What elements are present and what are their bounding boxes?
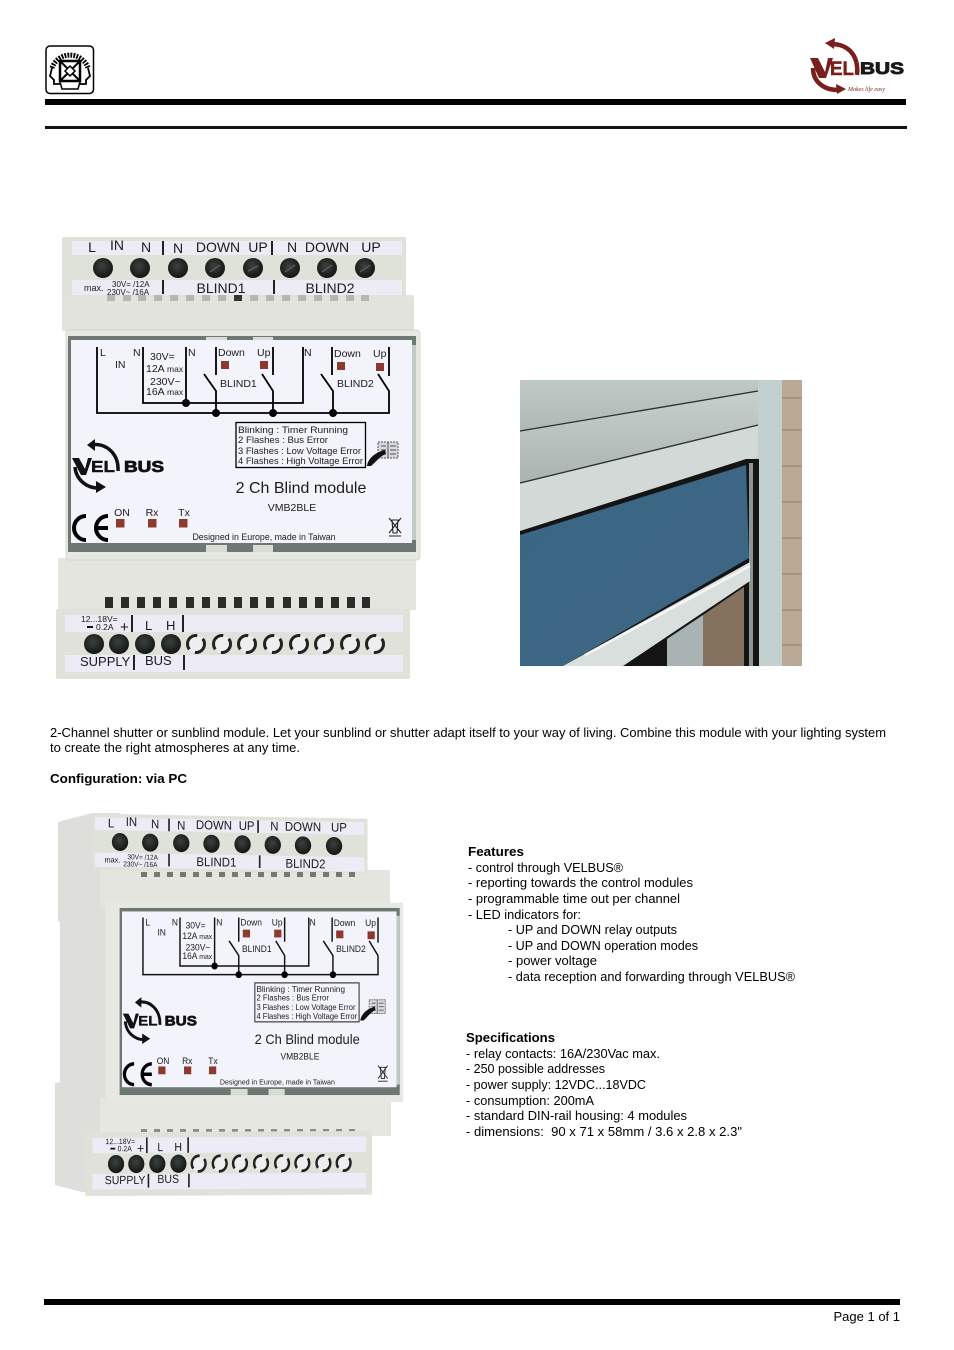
top terminal block: DOWN [305,239,349,255]
panel logo: Velbus: BUS [165,1013,197,1029]
wiring diagram: Up [373,348,387,360]
LED flash legend box [236,422,366,468]
panel logo: Velbus [72,439,164,493]
bottom terminal block: 0.2A [96,622,114,632]
features list: - UP and DOWN operation modes [508,939,698,953]
page number: Page 1 of 1 [834,1309,900,1324]
top terminal block: BLIND1 [196,854,237,870]
top terminal block: N [141,239,151,255]
top terminal block: UP [361,239,381,255]
wiring diagram: Up [272,917,283,927]
status LEDs: Rx [182,1056,193,1066]
top terminal block: DOWN [196,818,232,833]
header rule thin [45,126,907,129]
features list: - programmable time out per channel [468,892,680,906]
top terminal block: IN [110,237,124,253]
LED flash legend box: 3 Flashes : Low Voltage Error [238,446,361,457]
panel logo: Velbus: BUS [124,459,164,476]
LED flash legend box: Blinking : Timer Running [238,425,348,436]
wiring diagram [97,347,389,417]
bottom terminal block: 12...18V= [106,1137,135,1146]
bottom terminal block: L [157,1142,163,1154]
brick wall [782,380,802,666]
features list: - data reception and forwarding through VELBUS® [508,970,796,984]
header right logo: Velbus: Makes life easy [847,86,885,93]
shutter bottom bar [520,426,758,532]
wiring diagram: 30V= [186,920,206,931]
wiring diagram: BLIND1 [220,378,257,390]
bottom terminal block: + [120,619,129,636]
header right logo: Velbus: BUS [860,59,904,78]
photo: module front view [56,237,420,679]
status LEDs: Tx [178,507,191,519]
bottom terminal block: SUPPLY [105,1174,146,1187]
features list: - power voltage [508,954,597,968]
wiring diagram: Down [218,347,245,359]
top terminal block: max. [84,283,104,293]
top terminal block: L [108,816,114,831]
blue blind fabric [520,465,749,666]
status LEDs: Rx [146,507,159,519]
features list: - UP and DOWN relay outputs [508,923,677,937]
wiring diagram: 30V= [150,351,175,363]
header right logo: Velbus [810,38,904,94]
configuration line: Configuration: via PC [50,772,187,786]
top terminal block: IN [126,814,137,829]
intro paragraph: 2-Channel shutter or sunblind module. Let your sunblind or shutter adapt itself to your way of living. Combine this module with your lighting system [50,726,886,740]
module name: 2 Ch Blind module [236,480,366,497]
LED flash legend box [255,983,359,1022]
specifications list: - dimensions: 90 x 71 x 58mm / 3.6 x 2.8 x 2.3" [466,1125,742,1139]
status LEDs: Tx [208,1056,218,1066]
icon: WEEE bin [389,518,401,536]
wiring diagram: IN [115,359,126,371]
specifications list: - power supply: 12VDC...18VDC [466,1078,646,1092]
top terminal block: 30V= /12A [112,280,150,289]
top vent row [141,872,355,877]
top terminal block: max. [104,855,120,865]
top terminal block: L [88,239,96,255]
top terminal block [62,237,406,300]
lower housing band [100,1098,391,1136]
panel logo: Velbus: EL [91,459,115,476]
shutter slats [520,380,758,431]
specifications list [466,1031,742,1139]
origin note: Designed in Europe, made in Taiwan [220,1077,335,1087]
wiring diagram: BLIND2 [336,944,366,954]
bottom terminal block: BUS [145,653,172,668]
bottom terminal block: H [174,1141,182,1154]
features list: - reporting towards the control modules [468,876,693,890]
wiring diagram: N [133,347,141,359]
wiring diagram: IN [157,927,166,938]
bottom terminal block: + [137,1140,144,1156]
wiring diagram: 230V~ [150,376,181,388]
module name: 2 Ch Blind module [255,1032,360,1047]
panel logo: Velbus: EL [138,1013,157,1029]
bottom terminal block: SUPPLY [80,654,131,669]
brick in window [703,587,744,666]
photo: module angled view [55,813,403,1196]
wiring diagram: L [145,917,150,927]
model number: VMB2BLE [268,502,316,514]
top terminal block: BLIND2 [285,856,326,871]
top terminal block: DOWN [285,819,321,834]
wiring diagram: BLIND1 [242,944,272,954]
bottom terminal block [56,609,410,679]
wiring diagram: Down [334,348,361,360]
intro paragraph [50,726,886,755]
wiring diagram: 12A max [146,363,184,375]
icon: WEEE bin [378,1066,388,1081]
wiring diagram: 12A max [182,931,213,941]
wiring diagram: 16A max [146,386,184,398]
intro paragraph: to create the right atmospheres at any time. [50,741,300,755]
top terminal block: N [177,818,185,833]
top terminal block: 230V~ /16A [107,288,150,297]
features list: Features [468,845,524,859]
wiring diagram: N [304,347,312,359]
wiring diagram: L [100,347,106,359]
specifications list: - relay contacts: 16A/230Vac max. [466,1047,660,1061]
LED flash legend box: 4 Flashes : High Voltage Error [238,456,363,467]
top terminal block: UP [248,239,268,255]
features list: - control through VELBUS® [468,861,624,875]
wiring diagram: BLIND2 [337,378,374,390]
wiring diagram: Down [240,917,262,927]
LED flash legend box: 2 Flashes : Bus Error [256,993,329,1003]
bottom terminal block: 0.2A [118,1144,132,1153]
specifications list: - standard DIN-rail housing: 4 modules [466,1109,687,1123]
upper housing band [100,870,390,908]
top terminal block: BLIND2 [305,280,355,296]
footer rule [44,1299,900,1305]
top terminal block [91,814,368,874]
top terminal block: N [173,240,183,256]
bottom terminal block: BUS [157,1173,179,1186]
header left logo [46,46,94,94]
front panel with printed label [105,903,403,1102]
specifications list: - consumption: 200mA [466,1094,595,1108]
icon: manual and hand [360,1000,385,1021]
window frame below blind [667,615,703,666]
panel logo: Velbus [123,997,197,1044]
LED flash legend box: 2 Flashes : Bus Error [238,435,328,446]
window gap [520,459,759,666]
lower housing band [58,558,416,610]
model number: VMB2BLE [280,1051,320,1062]
status LEDs [114,507,191,528]
side frame [759,380,782,666]
specifications list: - 250 possible addresses [466,1062,605,1076]
wiring diagram: Down [334,918,355,928]
top terminal block: DOWN [196,239,240,255]
icon: CE mark [124,1064,152,1085]
top terminal block: 230V~ /16A [123,861,158,869]
top terminal block: N [270,819,279,834]
front panel with printed label [66,330,420,560]
wiring diagram: Up [365,918,376,928]
bottom terminal block [85,1131,372,1196]
icon: CE mark [74,516,108,540]
top terminal block: 30V= /12A [127,854,158,862]
status LEDs [157,1056,218,1074]
bottom terminal block: H [166,618,175,633]
header rule thick [45,99,906,105]
LED flash legend box: Blinking : Timer Running [256,985,345,994]
blind bottom bar [563,562,750,666]
LED flash legend box: 3 Flashes : Low Voltage Error [256,1003,356,1012]
wiring diagram: 230V~ [186,942,210,952]
bottom terminal block: 12...18V= [81,614,118,624]
wiring diagram: N [172,917,178,927]
bottom terminal block: L [145,618,152,633]
wiring diagram: 16A max [182,951,213,961]
status LEDs: ON [114,507,130,519]
origin note: Designed in Europe, made in Taiwan [192,532,336,542]
wiring diagram: N [188,347,196,359]
upper housing band [62,295,414,331]
specifications list: Specifications [466,1031,555,1045]
top terminal block: UP [331,820,347,835]
header right logo: Velbus: EL [830,59,854,80]
wiring diagram [143,917,378,978]
housing side wall [55,813,120,1192]
wiring diagram: N [216,917,222,927]
features list [468,845,796,984]
top terminal block: N [151,817,159,832]
icon: manual and hand [367,442,398,466]
features list: - LED indicators for: [468,908,581,922]
status LEDs: ON [157,1056,169,1066]
wiring diagram: Up [257,347,271,359]
LED flash legend box: 4 Flashes : High Voltage Error [256,1012,357,1021]
photo: roller blind [520,380,802,666]
top terminal block: BLIND1 [196,280,246,296]
top terminal block: UP [239,818,255,833]
top terminal block: N [287,239,297,255]
wiring diagram: N [310,917,316,927]
